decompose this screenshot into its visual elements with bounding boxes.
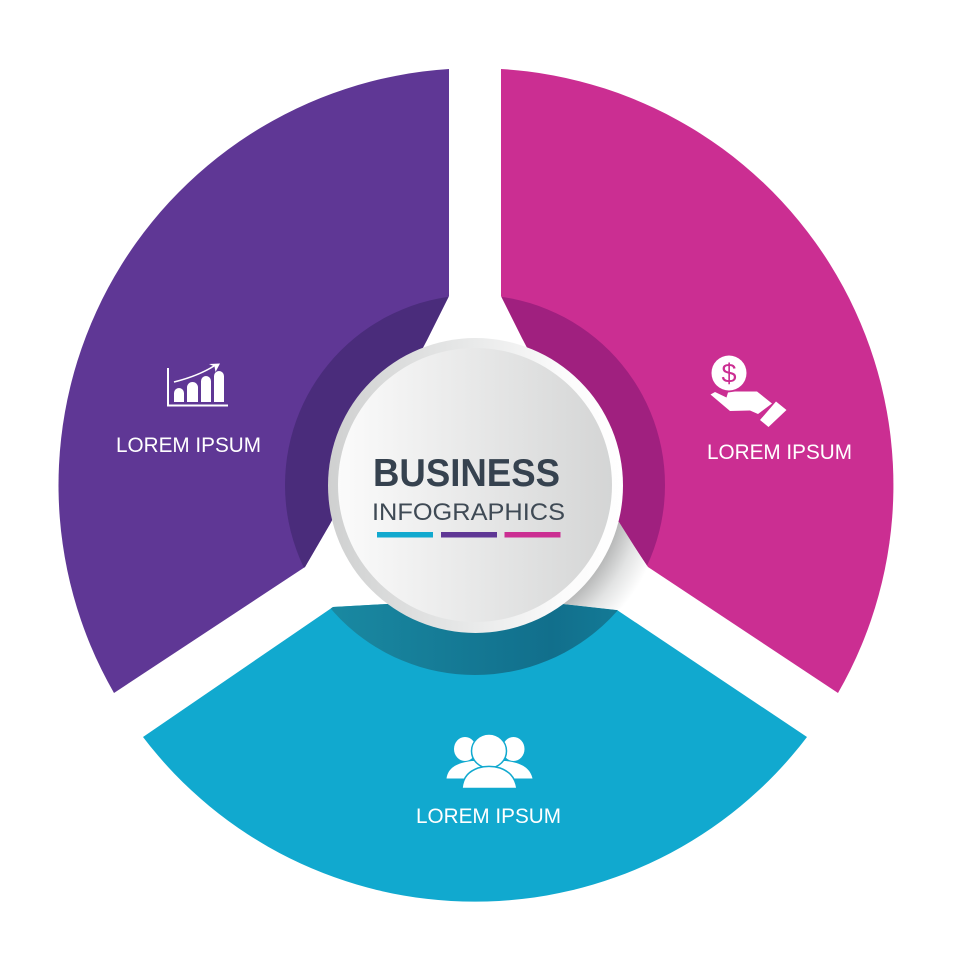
panel: blue segment bbox=[143, 604, 807, 902]
icon: hand holding coin bbox=[710, 356, 786, 427]
panel: magenta segment bbox=[501, 69, 894, 693]
title: business: BUSINESS bbox=[373, 452, 560, 495]
label: blue segment: LOREM IPSUM bbox=[416, 804, 561, 828]
center circle shadow bbox=[540, 522, 660, 610]
icon: group of people bbox=[446, 734, 532, 788]
icon: hand holding coin: $ bbox=[721, 358, 737, 388]
label: magenta segment: LOREM IPSUM bbox=[707, 440, 852, 464]
colour bars bbox=[377, 532, 560, 538]
center circle bbox=[328, 338, 623, 633]
subtitle: infographics: INFOGRAPHICS bbox=[372, 499, 565, 526]
label: purple segment: LOREM IPSUM bbox=[116, 433, 261, 457]
panel: purple segment bbox=[58, 69, 449, 693]
icon: growth chart bbox=[167, 364, 228, 406]
